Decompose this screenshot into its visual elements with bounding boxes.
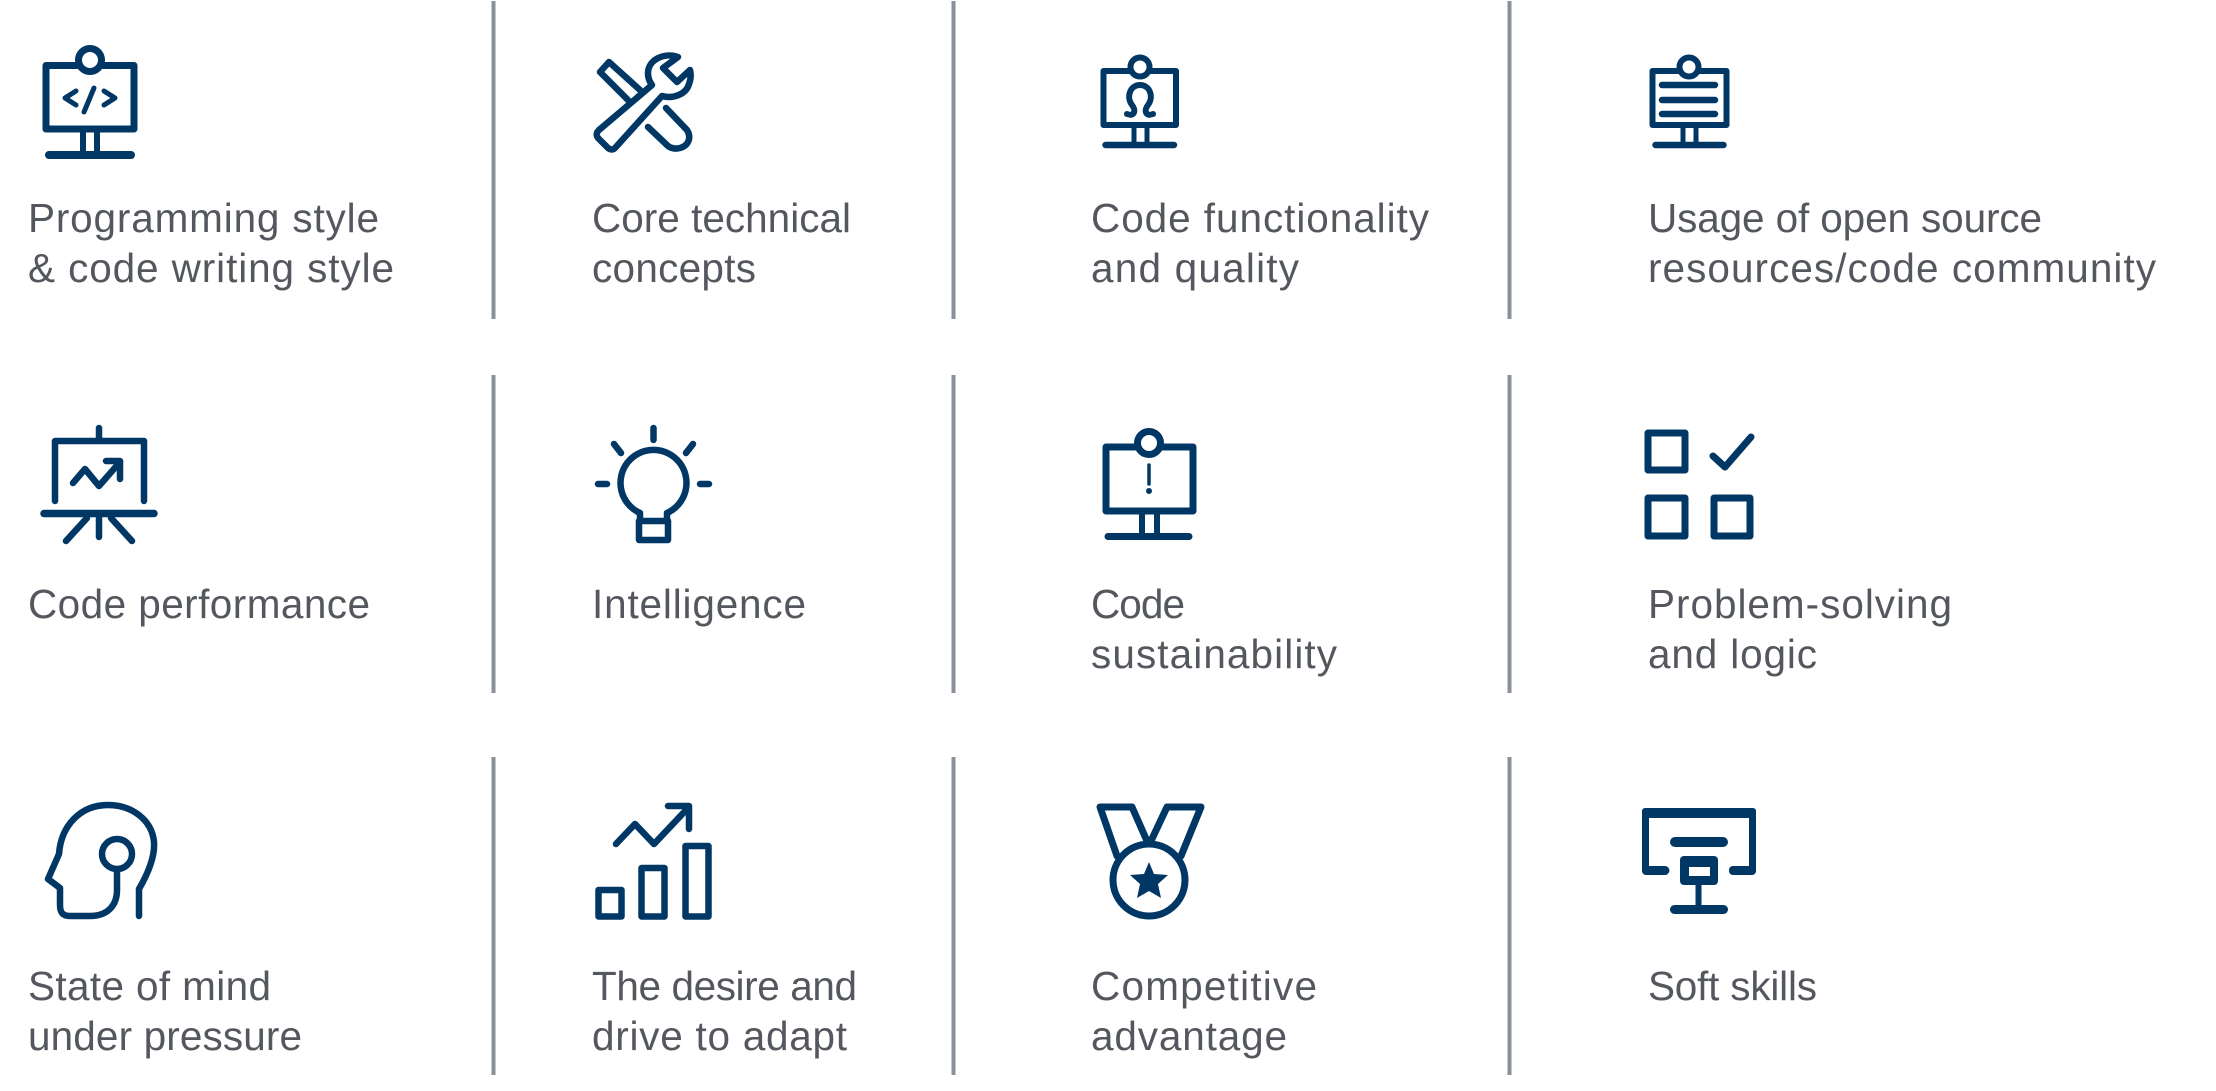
- label: desire to adapt: drive to adapt: [592, 1013, 847, 1059]
- label: open source usage: Usage of open source: [1648, 195, 2042, 241]
- label: desire to adapt: The desire and: [592, 963, 857, 1009]
- icon: checklist squares: [1648, 433, 1751, 536]
- label: open source usage: resources/code community: [1648, 245, 2157, 291]
- panel: problem-solving: [1648, 433, 1952, 677]
- icon: monitor with text lines: [1652, 58, 1726, 145]
- panel: intelligence: [592, 428, 806, 627]
- label: programming style: [28, 195, 394, 291]
- icon: medal with star: [1100, 807, 1201, 916]
- label: state of mind: State of mind: [28, 963, 271, 1009]
- panel: open source usage: [1648, 58, 2157, 291]
- label: competitive advantage: [1091, 963, 1317, 1059]
- label: code performance: Code performance: [28, 581, 370, 627]
- label: code functionality: Code functionality: [1091, 195, 1430, 241]
- panel: state of mind: [28, 805, 302, 1059]
- icon: head profile: [48, 805, 154, 916]
- label: competitive advantage: Competitive: [1091, 963, 1317, 1009]
- label: problem-solving: [1648, 581, 1952, 677]
- icon: monitor with omega: [1104, 58, 1176, 145]
- panel: code functionality: [1091, 58, 1430, 291]
- label: intelligence: Intelligence: [592, 581, 806, 627]
- panel: programming style: [28, 48, 394, 291]
- label: problem-solving: Problem-solving: [1648, 581, 1952, 627]
- label: programming style: Programming style: [28, 195, 379, 241]
- label: programming style: & code writing style: [28, 245, 394, 291]
- label: code functionality: [1091, 195, 1430, 291]
- label: code functionality: and quality: [1091, 245, 1300, 291]
- label: code sustainability: sustainability: [1091, 631, 1338, 677]
- icon: bar chart with rising arrow: [598, 806, 708, 916]
- label: desire to adapt: [592, 963, 857, 1059]
- icon: monitor with exclamation mark: [1106, 432, 1193, 536]
- panel: code performance: [28, 428, 370, 627]
- panel: soft skills: [1642, 808, 1817, 1009]
- label: core technical concepts: concepts: [592, 245, 756, 291]
- label: open source usage: [1648, 195, 2157, 291]
- icon: wrench and pencil: [597, 55, 691, 149]
- label: code sustainability: Code: [1091, 581, 1185, 627]
- label: soft skills: Soft skills: [1648, 963, 1817, 1009]
- label: competitive advantage: advantage: [1091, 1013, 1287, 1059]
- icon: monitor with code: [46, 48, 134, 155]
- panel: desire to adapt: [592, 806, 857, 1059]
- icon: presenter at screen: [1642, 808, 1756, 914]
- label: code sustainability: [1091, 581, 1338, 677]
- icon: light bulb: [598, 428, 709, 540]
- label: state of mind: [28, 963, 302, 1059]
- panel: core technical concepts: [592, 55, 851, 291]
- icon: presentation easel with chart: [44, 428, 154, 541]
- label: core technical concepts: Core technical: [592, 195, 851, 241]
- label: problem-solving: and logic: [1648, 631, 1817, 677]
- panel: competitive advantage: [1091, 807, 1317, 1059]
- label: state of mind: under pressure: [28, 1013, 302, 1059]
- label: core technical concepts: [592, 195, 851, 291]
- panel: code sustainability: [1091, 432, 1338, 677]
